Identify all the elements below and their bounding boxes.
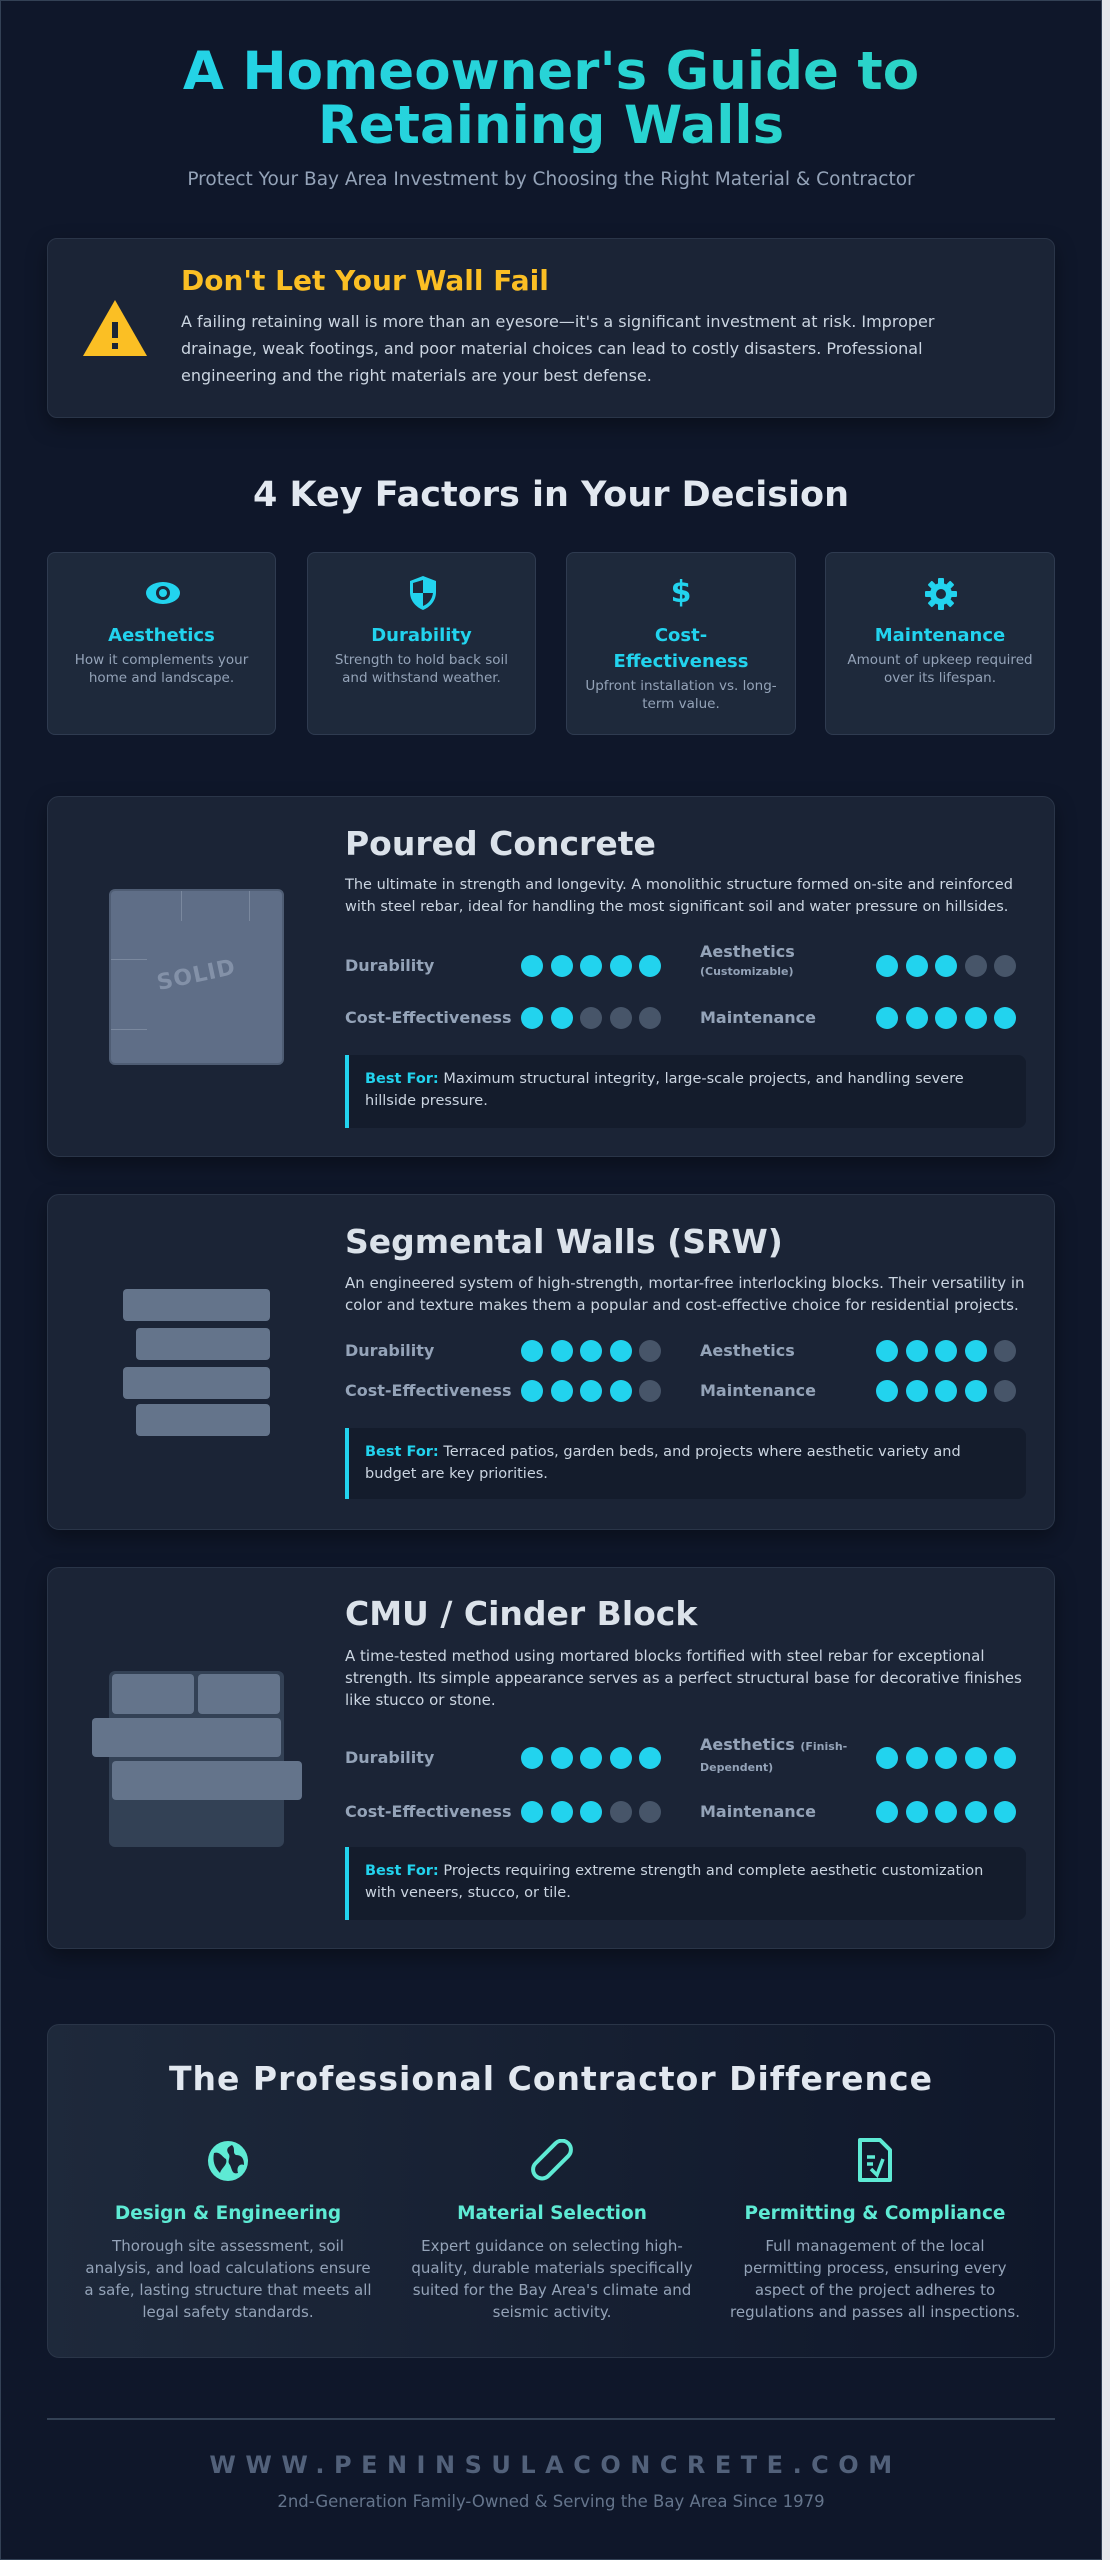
column: permitting & compliance: Full management of the local permitting process, ensuring every aspect of the project adheres to regulations and passes all inspections. xyxy=(730,2237,1020,2321)
column: design & engineering xyxy=(84,2141,372,2321)
column: design & engineering: Design & Engineering xyxy=(115,2203,341,2224)
column: design & engineering: Thorough site assessment, soil analysis, and load calculations ensure a safe, lasting structure that meets all legal safety standards. xyxy=(84,2237,372,2321)
title xyxy=(1,45,1101,153)
ratings: cmu: Durability xyxy=(345,1748,434,1767)
image: stacked blocks xyxy=(123,1289,270,1436)
ratings: cmu xyxy=(345,1735,1016,1823)
panel: warning xyxy=(47,238,1055,418)
ratings: poured: Aesthetics xyxy=(700,942,795,961)
panel: poured concrete xyxy=(47,796,1055,1157)
title: Retaining Walls xyxy=(318,95,784,156)
panel: cmu xyxy=(47,1567,1055,1949)
heading: contractor difference: The Professional Contractor Difference xyxy=(169,2059,933,2098)
callout: cmu best for xyxy=(345,1847,1026,1920)
card: durability xyxy=(307,552,536,735)
ratings: srw: Maintenance xyxy=(700,1381,816,1400)
column: material selection: Material Selection xyxy=(457,2203,647,2224)
column: permitting & compliance xyxy=(730,2138,1020,2321)
panel: segmental walls xyxy=(47,1194,1055,1530)
callout: poured best for xyxy=(345,1055,1026,1128)
heading: cmu: CMU / Cinder Block xyxy=(345,1594,697,1633)
card: maintenance: Maintenance xyxy=(875,625,1005,646)
ratings: srw: Cost-Effectiveness xyxy=(345,1381,511,1400)
footer: website: WWW.PENINSULACONCRETE.COM xyxy=(209,2451,902,2479)
column: permitting & compliance: Permitting & Compliance xyxy=(745,2203,1005,2224)
panel: contractor difference xyxy=(47,2024,1055,2358)
subtitle: Protect Your Bay Area Investment by Choosing the Right Material & Contractor xyxy=(187,169,915,190)
panel: cmu: Aesthetics (Finish- xyxy=(700,1735,847,1754)
text: warning body: A failing retaining wall is more than an eyesore—it's a significant investment at risk. Improper drainage, weak footings, and poor material choices can lead to costly disasters. Professional engineering and the right materials are your best defense. xyxy=(181,312,934,385)
image: solid concrete wall: SOLID xyxy=(155,955,238,996)
card: cost-effectiveness: Effectiveness xyxy=(614,651,748,672)
card: cost-effectiveness: Upfront installation vs. long-term value. xyxy=(585,678,777,712)
column: material selection xyxy=(411,2139,693,2321)
card: maintenance: Amount of upkeep required over its lifespan. xyxy=(847,652,1033,686)
ratings: cmu: Maintenance xyxy=(700,1802,816,1821)
callout: srw best for xyxy=(345,1428,1026,1499)
callout: cmu best for: Best For: Projects requiring extreme strength and complete aesthetic customization with veneers, stucco, or tile. xyxy=(365,1863,983,1901)
card: cost-effectiveness: Cost- xyxy=(655,625,707,646)
icon: warning triangle xyxy=(83,300,147,356)
callout: srw best for: Best For: Terraced patios, garden beds, and projects where aesthetic variety and budget are key priorities. xyxy=(365,1444,961,1482)
heading: key factors: 4 Key Factors in Your Decision xyxy=(253,475,849,515)
card: maintenance xyxy=(825,552,1055,735)
text: cmu description: A time-tested method using mortared blocks fortified with steel rebar for exceptional strength. Its simple appearance serves as a perfect structural base for decorative finishes like stucco or stone. xyxy=(345,1647,1022,1709)
ratings: srw: Durability xyxy=(345,1341,434,1360)
ratings: poured xyxy=(345,942,1016,1029)
card: aesthetics: How it complements your home and landscape. xyxy=(75,652,248,686)
icon: dollar: $ xyxy=(671,575,691,610)
icon: shield xyxy=(410,576,436,610)
ratings: cmu: Cost-Effectiveness xyxy=(345,1802,511,1821)
card: durability: Strength to hold back soil and withstand weather. xyxy=(335,652,508,686)
icon: capsule xyxy=(531,2139,573,2180)
ratings: poured: Maintenance xyxy=(700,1008,816,1027)
card: durability: Durability xyxy=(371,625,472,646)
icon: document xyxy=(858,2138,892,2182)
footer: tagline: 2nd-Generation Family-Owned & Serving the Bay Area Since 1979 xyxy=(277,2492,825,2511)
heading: segmental walls: Segmental Walls (SRW) xyxy=(345,1222,783,1261)
ratings: poured: Durability xyxy=(345,956,434,975)
icon: globe xyxy=(208,2141,248,2181)
column: material selection: Expert guidance on selecting high-quality, durable materials specifically suited for the Bay Area's climate and seismic activity. xyxy=(411,2237,693,2321)
ratings: srw: Aesthetics xyxy=(700,1341,795,1360)
card: cost-effectiveness xyxy=(566,552,796,735)
text: poured description: The ultimate in strength and longevity. A monolithic structure formed on-site and reinforced with steel rebar, ideal for handling the most significant soil and water pressure on hillsides. xyxy=(345,877,1013,915)
image: cmu blocks xyxy=(92,1671,302,1847)
image: solid concrete wall xyxy=(109,889,284,1065)
ratings: srw xyxy=(345,1340,1016,1402)
ratings: cmu: Dependent) xyxy=(700,1761,773,1774)
icon: eye xyxy=(146,582,180,604)
icon: gear xyxy=(925,578,957,610)
heading: warning: Don't Let Your Wall Fail xyxy=(181,264,549,297)
card: aesthetics: Aesthetics xyxy=(108,625,215,646)
card: aesthetics xyxy=(47,552,276,735)
text: srw description: An engineered system of high-strength, mortar-free interlocking blocks. Their versatility in color and texture makes them a popular and cost-effective choice for residential projects. xyxy=(345,1274,1025,1314)
callout: poured best for: Best For: Maximum structural integrity, large-scale projects, and handling severe hillside pressure. xyxy=(365,1071,964,1109)
ratings: poured: (Customizable) xyxy=(700,965,793,978)
title: A Homeowner's Guide to xyxy=(183,41,919,102)
heading: poured concrete: Poured Concrete xyxy=(345,824,656,863)
ratings: poured: Cost-Effectiveness xyxy=(345,1008,511,1027)
